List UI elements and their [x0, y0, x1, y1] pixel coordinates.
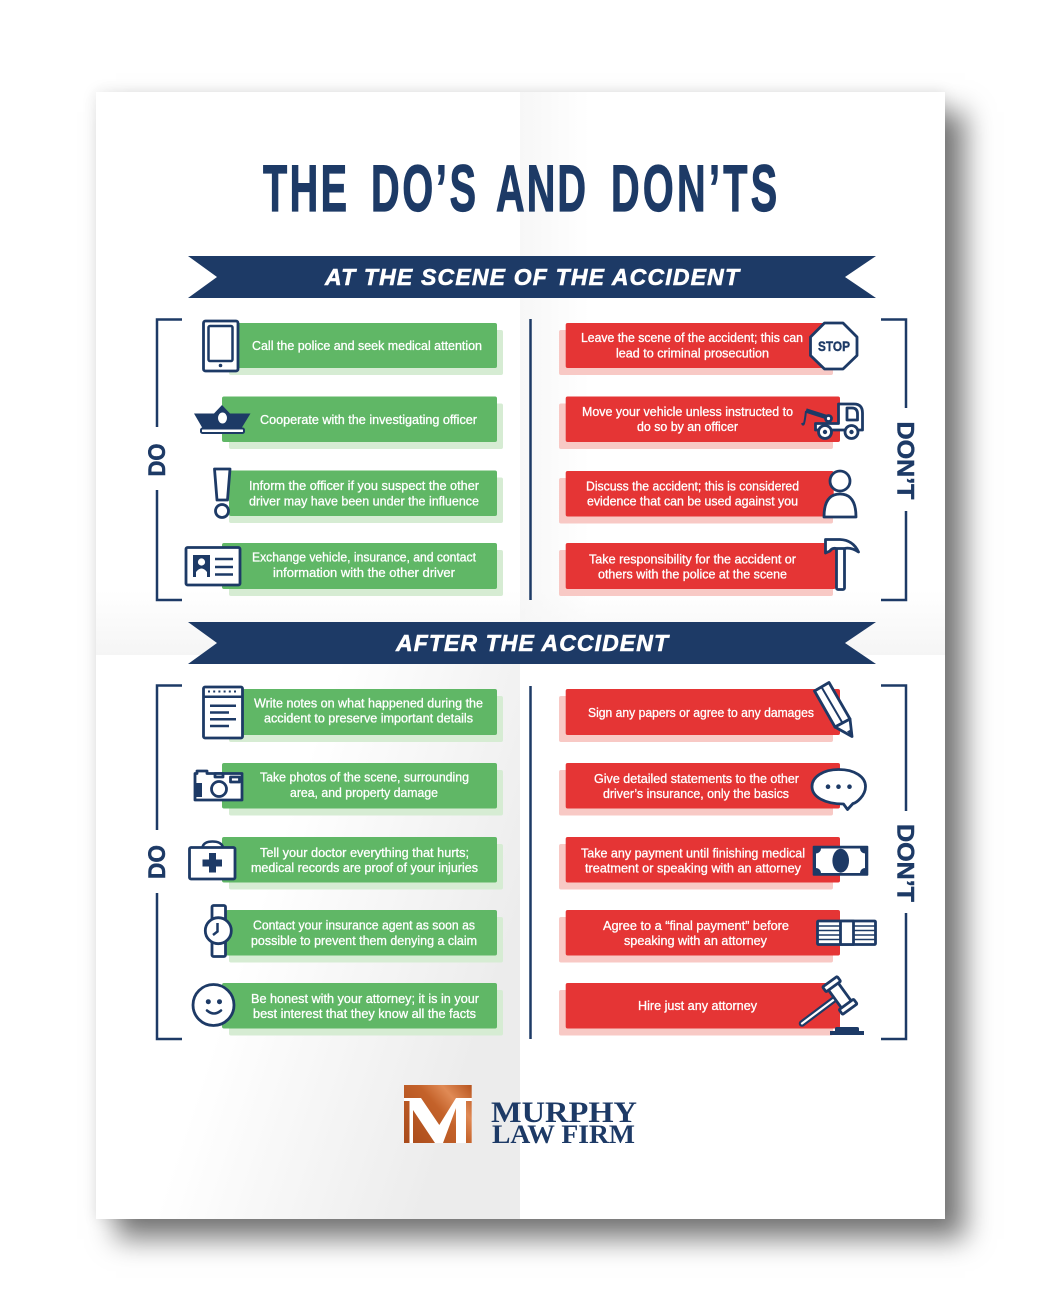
item: discuss the accident: Discuss the accident; this is considered: [586, 479, 799, 494]
item: take any payment: [559, 837, 868, 890]
logo: murphy law firm: [404, 1085, 637, 1149]
item: write notes: accident to preserve important details: [264, 711, 473, 726]
logo wordmark: [491, 1096, 637, 1149]
icon: stop sign: STOP: [818, 338, 850, 354]
item: leave the scene: Leave the scene of the accident; this can: [581, 330, 803, 345]
item: agree to final payment: speaking with an attorney: [624, 933, 767, 948]
item: take photos: [195, 763, 503, 816]
item: take responsibility: Take responsibility for the accident or: [589, 552, 797, 567]
item: agree to final payment: [559, 910, 876, 962]
title: DON’TS: [611, 152, 777, 226]
dont bracket: [881, 686, 918, 1039]
icon: camera: [195, 771, 242, 800]
item: take any payment: treatment or speaking with an attorney: [585, 861, 801, 876]
icon: stack of money: [818, 921, 876, 944]
icon: hammer: [826, 540, 858, 590]
item: hire any attorney: [559, 976, 864, 1036]
icon: tow truck: [802, 404, 862, 438]
do bracket: [144, 686, 182, 1039]
do bracket: [144, 320, 182, 600]
icon: stop sign: [810, 323, 857, 369]
item: contact insurance agent: [205, 906, 503, 962]
item: discuss the accident: [559, 471, 856, 524]
item: call the police: Call the police and seek medical attention: [252, 338, 482, 353]
item: tell your doctor: medical records are proof of your injuries: [251, 860, 478, 875]
item: inform the officer: driver may have been under the influence: [249, 494, 479, 509]
banner: at the scene of the accident: AT THE SCENE OF THE ACCIDENT: [324, 264, 741, 290]
item: cooperate with officer: [194, 396, 503, 449]
icon: bank note: [813, 846, 868, 876]
logo wordmark: MURPHY: [491, 1096, 637, 1129]
item: give detailed statements: [559, 763, 866, 816]
item: contact insurance agent: possible to prevent them denying a claim: [251, 933, 477, 948]
item: take responsibility: [559, 540, 858, 596]
item: take responsibility: others with the police at the scene: [598, 567, 787, 582]
item: be honest: Be honest with your attorney; it is in your: [251, 991, 480, 1006]
icon: tablet: [204, 321, 238, 371]
dont bracket: [881, 320, 918, 600]
item: exchange information: Exchange vehicle, insurance, and contact: [252, 550, 476, 565]
item: cooperate with officer: Cooperate with the investigating officer: [260, 412, 478, 427]
icon: smiley face: [193, 984, 234, 1026]
logo mark: [404, 1085, 472, 1143]
item: take photos: Take photos of the scene, surrounding: [260, 770, 469, 785]
panel: don't, after the accident: [559, 682, 918, 1039]
panel: do, after the accident: [144, 686, 503, 1039]
icon: gavel: [802, 976, 864, 1035]
icon: exclamation mark: [214, 469, 230, 518]
paper fold shading: [96, 92, 945, 1219]
item: be honest: best interest that they know all the facts: [253, 1006, 476, 1021]
icon: wristwatch: [205, 906, 231, 956]
title: DO’S: [371, 152, 476, 226]
banner: at the scene of the accident: [188, 256, 876, 298]
item: exchange information: information with the other driver: [273, 565, 456, 580]
center divider: [529, 319, 532, 600]
banner: after the accident: [188, 622, 876, 664]
item: write notes: Write notes on what happened during the: [254, 696, 483, 711]
title: [263, 152, 777, 226]
dont bracket: DON’T: [892, 422, 918, 500]
do bracket: DO: [144, 444, 171, 476]
item: sign any papers: Sign any papers or agree to any damages: [588, 705, 814, 720]
item: give detailed statements: driver’s insurance, only the basics: [603, 786, 789, 801]
item: sign any papers: [559, 682, 852, 742]
dont bracket: DON’T: [892, 824, 918, 902]
icon: pencil: [814, 682, 852, 737]
item: hire any attorney: Hire just any attorney: [638, 998, 757, 1013]
icon: id card: [186, 548, 240, 585]
item: move your vehicle: [559, 396, 862, 449]
banner: after the accident: AFTER THE ACCIDENT: [395, 630, 670, 656]
center divider: [529, 686, 532, 1039]
item: move your vehicle: do so by an officer: [637, 419, 739, 434]
item: be honest: [193, 983, 503, 1036]
item: inform the officer: Inform the officer if you suspect the other: [249, 478, 480, 493]
panel: do, at the scene: [144, 320, 503, 600]
item: move your vehicle: Move your vehicle unless instructed to: [582, 404, 793, 419]
item: tell your doctor: Tell your doctor everything that hurts;: [260, 845, 469, 860]
do bracket: DO: [144, 845, 171, 879]
title: THE: [263, 152, 347, 226]
item: discuss the accident: evidence that can be used against you: [587, 494, 798, 509]
paper sheet: [96, 92, 945, 1219]
logo wordmark: LAW FIRM: [492, 1120, 635, 1149]
item: call the police: [204, 321, 503, 375]
item: exchange information: [186, 543, 503, 596]
item: tell your doctor: [190, 837, 503, 890]
icon: speech bubble: [812, 770, 866, 810]
item: leave the scene: [559, 323, 857, 375]
icon: police hat: [194, 405, 250, 433]
panel: don't, at the scene: [559, 320, 918, 600]
item: give detailed statements: Give detailed statements to the other: [594, 771, 800, 786]
item: take any payment: Take any payment until finishing medical: [581, 846, 805, 861]
item: agree to final payment: Agree to a “final payment” before: [603, 918, 789, 933]
item: inform the officer: [214, 469, 503, 523]
item: leave the scene: lead to criminal prosecution: [616, 346, 769, 361]
item: write notes: [204, 687, 503, 742]
title: AND: [496, 152, 586, 226]
icon: notes document: [204, 687, 242, 738]
item: contact insurance agent: Contact your insurance agent as soon as: [253, 918, 475, 933]
item: take photos: area, and property damage: [290, 785, 438, 800]
icon: medical kit: [190, 842, 235, 879]
icon: person: [824, 471, 856, 517]
